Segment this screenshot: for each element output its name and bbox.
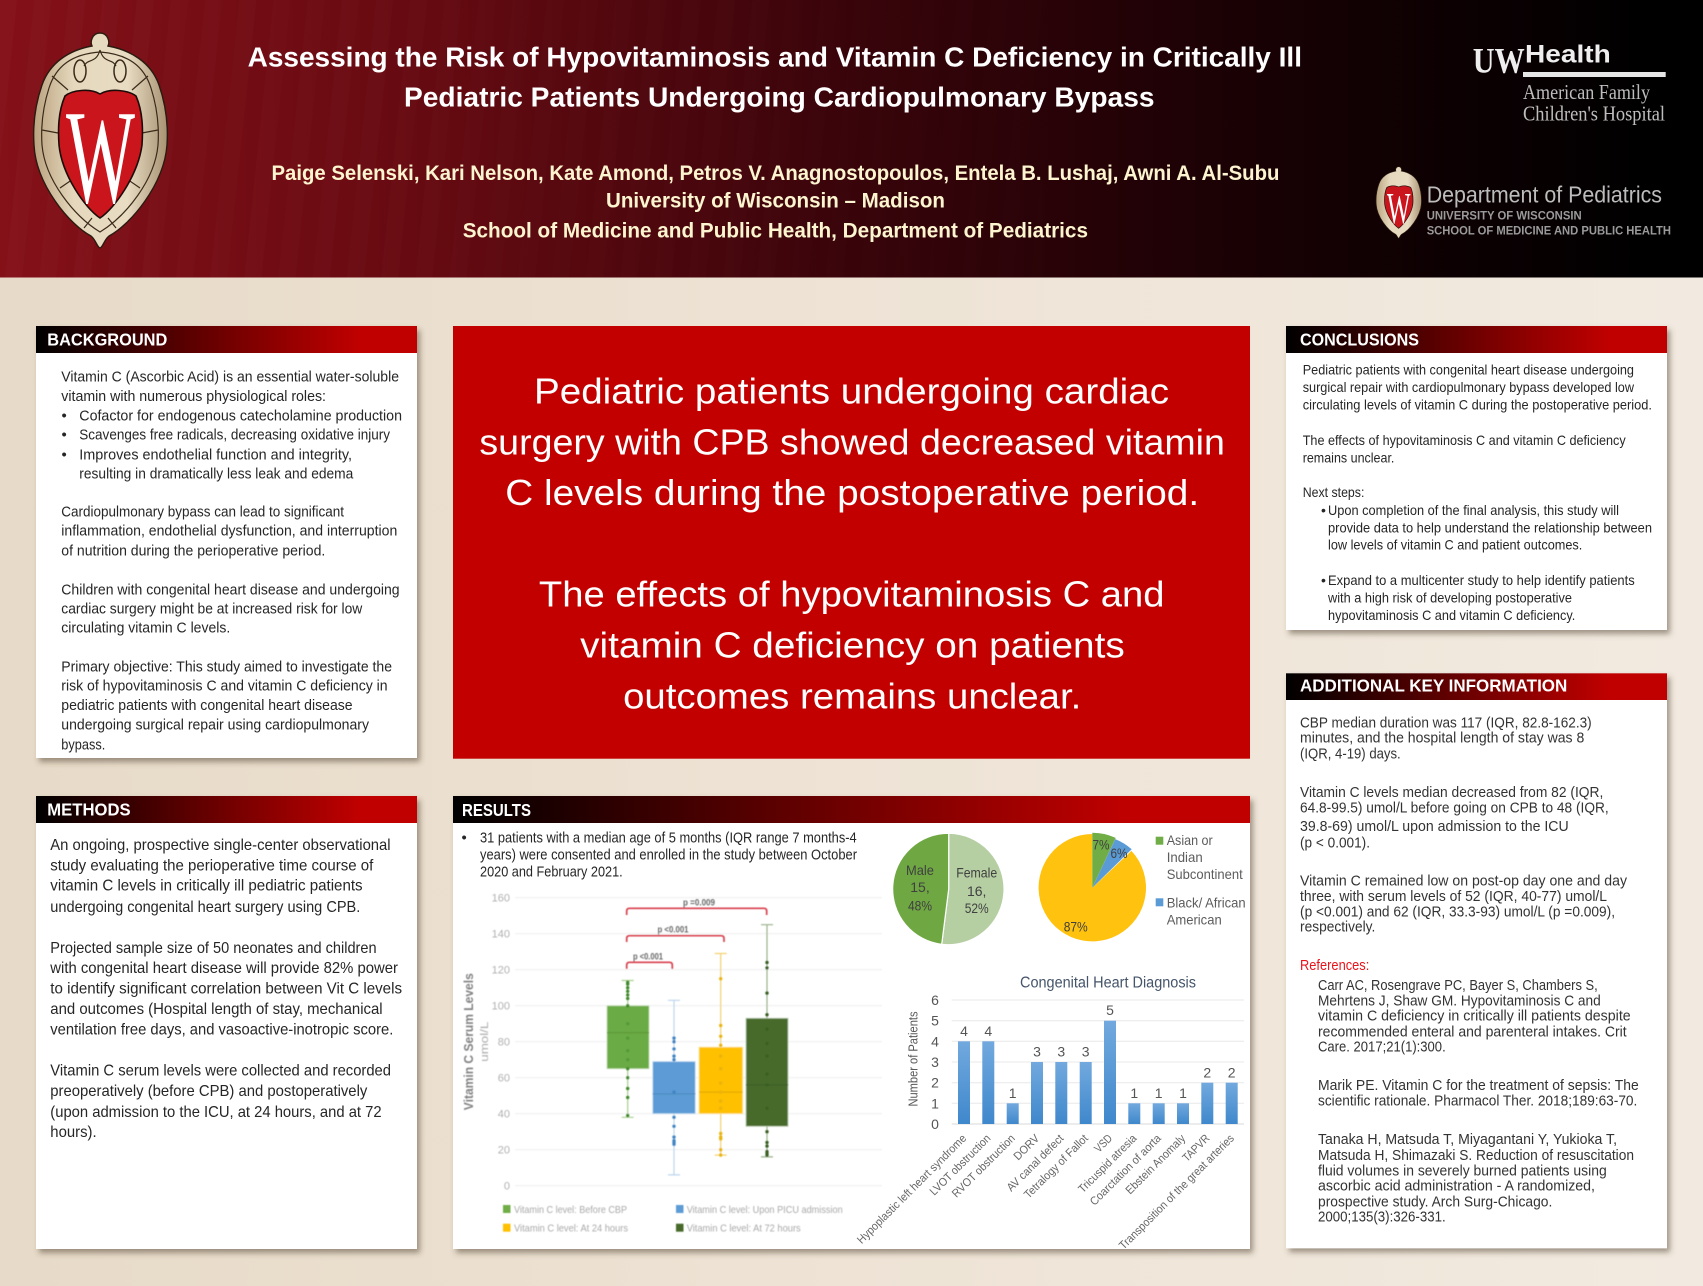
category labels: Ebstein Anomaly [1124,1132,1188,1197]
text: cardiopulmonary bypass effects: inflammation, endothelial dysfunction, and interruption [61,523,397,540]
y axis values: 0 [931,1116,939,1132]
reference: Carr: recommended enteral and parenteral intakes. Crit [1318,1024,1627,1040]
text: primary objective [61,658,392,753]
text: vitamin C decrease: (p < 0.001). [1300,836,1370,852]
text: cardiopulmonary bypass effects: Cardiopulmonary bypass can lead to significant [61,503,345,520]
label: male [906,862,934,914]
category labels: Coarctation of aorta [1088,1132,1164,1208]
bar values: 2 [1203,1064,1211,1080]
text: next steps: Upon completion of the final analysis, this study will [1328,502,1619,518]
authors and affiliations [272,162,1279,242]
text: study design: undergoing congenital heart surgery using CPB. [50,899,360,916]
reference: Carr: Care. 2017;21(1):300. [1318,1040,1446,1056]
text: sample size [49,940,402,1038]
category labels: Hypoplastic left heart syndrome [855,1133,969,1246]
label: male: 48% [908,898,932,914]
icon: small crest [1376,167,1421,238]
logo: Department of Pediatrics: Department of Pediatrics [1427,181,1662,207]
bar values: 1 [1130,1085,1138,1101]
panel: background [36,326,417,758]
heading: references: References: [1300,958,1369,974]
logo: UW Health American Family Children's Hospital: Children's Hospital [1523,102,1665,126]
heading: methods [36,796,417,823]
reference: Marik: Marik PE. Vitamin C for the treatment of sepsis: The [1318,1078,1639,1094]
authors and affiliations: University of Wisconsin – Madison [606,190,945,213]
text: children at risk: cardiac surgery might be at increased risk for low [61,601,362,618]
text: data collection: hours). [50,1124,97,1141]
logo: Department of Pediatrics [1376,167,1671,238]
text: post-op levels: Vitamin C remained low on post-op day one and day [1300,874,1628,890]
box: at 72 hours [746,925,788,1157]
text: post-op levels: respectively. [1300,920,1375,936]
bar values: 1 [1179,1085,1187,1101]
text: children at risk: Children with congenital heart disease and undergoing [61,581,400,598]
heading: results: RESULTS [462,800,531,820]
text: effects unclear [1303,432,1626,465]
category labels: DORV [1012,1132,1042,1163]
header banner [0,0,1703,278]
box: before CPB [607,980,649,1117]
legend: race: Black/ African [1167,894,1246,910]
label: female [956,865,997,916]
text: unclear effects: outcomes remains unclear. [623,675,1081,716]
category labels [855,1132,1237,1252]
text: main finding [479,370,1225,513]
y axis labels: 80 [498,1037,510,1049]
panel: key message [453,326,1250,759]
text: vitamin C roles: Vitamin C (Ascorbic Acid) is an essential water-soluble [61,369,399,386]
text: sample size: to identify significant correlation between Vit C levels [50,980,402,997]
y axis labels: 60 [498,1073,510,1085]
text: next steps: • [1321,502,1326,518]
y axis labels: 40 [498,1109,510,1121]
icon: small crest: W [1387,183,1411,233]
text: vitamin C roles: • [62,426,67,443]
text: low vitamin C finding [1303,361,1652,413]
label: percentages: 6% [1110,845,1128,861]
legend: race: American [1167,912,1222,928]
text: study design [50,837,391,916]
significance bracket: p =0.009: p =0.009 [683,898,715,908]
text: primary objective: risk of hypovitaminosis C and vitamin C deficiency in [61,678,388,695]
text: patient summary: 2020 and February 2021. [480,864,623,881]
text: sample size: Projected sample size of 50 neonates and children [50,940,377,957]
text: sample size: with congenital heart disease will provide 82% power [49,960,399,977]
text: vitamin C decrease: 39.8-69) umol/L upon admission to the ICU [1300,819,1569,835]
y axis labels: 100 [492,1001,510,1013]
text: CBP duration: CBP median duration was 117 (IQR, 82.8-162.3) [1300,715,1592,731]
heading: conclusions: CONCLUSIONS [1300,329,1419,349]
heading: additional key information [1286,673,1667,700]
text: patient summary: 31 patients with a median age of 5 months (IQR range 7 months-4 [480,829,857,846]
text: primary objective: pediatric patients with congenital heart disease [61,697,353,714]
bar values: 5 [1106,1002,1114,1018]
logo: UW Health American Family Children's Hospital: UW [1473,41,1525,81]
text: next steps: provide data to help understand the relationship between [1328,519,1652,535]
heading: conclusions [1286,326,1667,353]
category labels: Tetralogy of Fallot [1022,1132,1091,1201]
y axis labels: 140 [492,929,510,941]
significance bracket: p <0.001 at 24 hours [627,924,724,942]
text: cardiopulmonary bypass effects: of nutrition during the perioperative period. [61,543,325,560]
text: next steps: hypovitaminosis C and vitamin C deficiency. [1328,607,1575,623]
reference: Tanaka: prospective study. Arch Surg-Chicago. [1318,1194,1552,1210]
title [248,42,1302,113]
category labels: TAPVR [1181,1133,1212,1164]
text: data collection: Vitamin C serum levels were collected and recorded [50,1063,391,1080]
box: upon PICU admission [653,1000,695,1175]
chart: race pie [1039,832,1246,941]
y axis values: 3 [931,1054,939,1070]
label: male: 15, [910,879,930,895]
text: unclear effects [539,574,1164,716]
text: data collection: preoperatively (before CPB) and postoperatively [50,1083,367,1100]
text: vitamin C roles: Cofactor for endogenous catecholamine production [79,407,402,424]
label: female: 16, [967,883,986,899]
y axis labels: 160 [492,893,510,905]
y axis labels: 120 [492,965,510,977]
text: vitamin C decrease [1300,785,1609,852]
text: unclear effects: The effects of hypovitaminosis C and [539,574,1164,615]
text: vitamin C roles: vitamin with numerous physiological roles: [61,388,326,405]
bar values: 2 [1228,1064,1236,1080]
logo: UW Health American Family Children's Hospital [1473,41,1666,126]
heading: additional key information: ADDITIONAL KEY INFORMATION [1300,676,1567,696]
legend: race: Asian or [1167,832,1213,848]
legend: box plot [503,1204,843,1235]
panel: additional key information [1286,673,1667,1248]
y axis title [462,973,491,1110]
text: effects unclear: remains unclear. [1303,449,1394,465]
bar values: 4 [984,1023,992,1039]
label: percentages [1064,837,1128,935]
panel: results [453,796,1250,1252]
reference: Carr [1318,978,1631,1056]
text: post-op levels: three, with serum levels of 52 (IQR, 40-77) umol/L [1300,889,1607,905]
text: data collection: (upon admission to the ICU, at 24 hours, and at 72 [50,1104,382,1121]
logo: Department of Pediatrics: SCHOOL OF MEDICINE AND PUBLIC HEALTH [1427,226,1671,238]
text: vitamin C decrease: Vitamin C levels median decreased from 82 (IQR, [1300,785,1603,801]
title: Pediatric Patients Undergoing Cardiopulmonary Bypass [404,82,1154,113]
legend: race: Subcontinent [1167,866,1243,882]
logo: UW Health American Family Children's Hospital: Health [1525,41,1611,69]
legend: box plot: Vitamin C level: Before CBP [514,1204,627,1216]
text: low vitamin C finding: surgical repair with cardiopulmonary bypass developed low [1303,379,1635,395]
y axis values: 2 [931,1075,939,1091]
legend: box plot: Vitamin C level: At 24 hours [514,1223,628,1235]
text: CBP duration [1300,715,1592,762]
category labels: AV canal defect [1005,1132,1067,1194]
logo: UW Health American Family Children's Hospital: American Family [1523,80,1650,104]
chart: sex pie [893,833,1004,945]
reference: Tanaka: fluid volumes in severely burned patients using [1318,1163,1607,1179]
text: main finding: Pediatric patients undergoing cardiac [534,370,1169,411]
text: post-op levels: (p <0.001) and 62 (IQR, 33.3-93) umol/L (p =0.009), [1300,905,1615,921]
text: next steps: • [1321,572,1326,588]
y axis values [931,992,939,1132]
text: unclear effects: vitamin C deficiency on patients [580,625,1125,666]
significance bracket: p <0.001 at 24 hours: p <0.001 [658,924,688,934]
text: next steps: Expand to a multicenter study to help identify patients [1328,572,1635,588]
text: patient summary: years) were consented and enrolled in the study between October [480,846,857,863]
text: vitamin C roles: • [62,446,67,463]
logo: Department of Pediatrics: UNIVERSITY OF WISCONSIN [1427,210,1582,222]
y axis title: Number of Patients [906,1012,920,1106]
text: low vitamin C finding: circulating levels of vitamin C during the postoperative period. [1303,397,1652,413]
label: male: Male [906,862,934,878]
bar values: 3 [1033,1044,1041,1060]
category labels: Tricuspid atresia [1076,1132,1140,1196]
text: next steps [1303,484,1652,623]
reference: Marik [1318,1078,1639,1110]
icon: UW crest: W [66,83,135,231]
icon: UW crest [34,33,167,248]
y axis labels [492,893,510,1193]
y axis values: 1 [931,1095,939,1111]
y axis title: umol/L [479,1022,491,1062]
y axis values: 4 [931,1033,939,1049]
label: female: 52% [965,900,989,916]
text: main finding: surgery with CPB showed decreased vitamin [479,421,1225,462]
text: next steps: with a high risk of developing postoperative [1327,590,1572,606]
authors and affiliations: Paige Selenski, Kari Nelson, Kate Amond, Petros V. Anagnostopoulos, Entela B. Lushaj, Awni A. Al-Subu [272,162,1279,185]
chart: vitamin C box plot [462,893,882,1235]
significance bracket: p =0.009 [627,898,767,915]
text: cardiopulmonary bypass effects [61,503,397,560]
reference: Tanaka: ascorbic acid administration - A randomized, [1318,1179,1595,1195]
reference: Tanaka: 2000;135(3):326-331. [1318,1210,1446,1226]
y axis values: 6 [931,992,939,1008]
text: vitamin C decrease: 64.8-99.5) umol/L before going on CPB to 48 (IQR, [1300,800,1609,816]
text: vitamin C roles: Scavenges free radicals, decreasing oxidative injury [79,426,390,443]
reference: Carr: Mehrtens J, Shaw GM. Hypovitaminosis C and [1318,993,1601,1009]
text: CBP duration: (IQR, 4-19) days. [1300,746,1401,762]
text: next steps: Next steps: [1303,484,1364,500]
y axis values: 5 [931,1013,939,1029]
bar values: 1 [1009,1085,1017,1101]
significance bracket: p <0.001: p <0.001 [633,952,663,962]
text: children at risk [61,581,400,636]
legend: box plot: Vitamin C level: At 72 hours [687,1223,801,1235]
box: at 24 hours [699,954,743,1157]
reference: Carr: Carr AC, Rosengrave PC, Bayer S, Chambers S, [1318,978,1598,994]
bar values: 1 [1155,1085,1163,1101]
text: effects unclear: The effects of hypovitaminosis C and vitamin C deficiency [1303,432,1626,448]
category labels: VSD [1092,1133,1115,1155]
significance bracket: p <0.001 [627,952,672,969]
label: percentages: 7% [1092,837,1110,853]
text: study design: vitamin C levels in critically ill pediatric patients [50,878,363,895]
y axis title: Vitamin C Serum Levels [462,973,476,1110]
text: vitamin C roles: resulting in dramatically less leak and edema [79,466,354,483]
category labels: LVOT obstruction [928,1133,993,1198]
text: vitamin C roles: Improves endothelial function and integrity, [79,446,352,463]
reference: Marik: scientific rationale. Pharmacol Ther. 2018;189:63-70. [1318,1094,1637,1110]
reference: Tanaka: Tanaka H, Matsuda T, Miyagantani Y, Yukioka T, [1318,1132,1617,1148]
heading: background: BACKGROUND [47,329,167,349]
heading: methods: METHODS [47,799,131,819]
text: low vitamin C finding: Pediatric patients with congenital heart disease undergoing [1303,361,1634,377]
label: percentages: 87% [1064,919,1088,935]
y axis labels: 0 [504,1181,510,1193]
heading: results [453,796,1250,823]
title: Assessing the Risk of Hypovitaminosis and Vitamin C Deficiency in Critically Ill [248,42,1302,73]
text: main finding: C levels during the postoperative period. [505,472,1199,513]
bar values [960,1002,1236,1101]
authors and affiliations: School of Medicine and Public Health, Department of Pediatrics [463,219,1088,242]
legend: race: Indian [1167,849,1203,865]
text: primary objective: Primary objective: This study aimed to investigate the [61,658,392,675]
text: primary objective: bypass. [61,736,105,753]
legend: box plot: Vitamin C level: Upon PICU admission [687,1204,843,1216]
bar values: 3 [1082,1044,1090,1060]
reference: Carr: vitamin C deficiency in critically ill patients despite [1318,1009,1631,1025]
text: post-op levels [1300,874,1628,936]
text: study design: study evaluating the perioperative time course of [50,857,374,874]
text: patient summary: • [462,829,467,846]
heading: background [36,326,417,353]
text: sample size: ventilation free days, and vasoactive-inotropic score. [50,1021,393,1038]
text: vitamin C roles: • [62,407,67,424]
text: study design: An ongoing, prospective single-center observational [50,837,391,854]
text: children at risk: circulating vitamin C levels. [61,619,230,636]
bars [958,1021,1238,1124]
text: sample size: and outcomes (Hospital length of stay, mechanical [50,1001,383,1018]
chart: congenital heart diagnosis bars [855,974,1244,1252]
text: vitamin C roles [61,369,402,483]
category labels: Transposition of the great arteries [1117,1132,1237,1252]
reference: Tanaka: Matsuda H, Shimazaki S. Reduction of resuscitation [1318,1148,1634,1164]
category labels: RVOT obstruction [950,1133,1018,1200]
panel: conclusions [1286,326,1667,630]
bar values: 3 [1057,1044,1065,1060]
chart title: Congenital Heart Diagnosis [1020,974,1196,992]
y axis labels: 20 [498,1145,510,1157]
legend: race [1156,832,1246,928]
reference: Tanaka [1318,1132,1634,1226]
text: primary objective: undergoing surgical repair using cardiopulmonary [61,716,369,733]
bar values: 4 [960,1023,968,1039]
label: female: Female [956,865,997,881]
text: patient summary [462,829,857,881]
text: data collection [50,1063,391,1141]
text: CBP duration: minutes, and the hospital length of stay was 8 [1300,731,1584,747]
text: next steps: low levels of vitamin C and patient outcomes. [1328,537,1582,553]
panel: methods [36,796,417,1249]
